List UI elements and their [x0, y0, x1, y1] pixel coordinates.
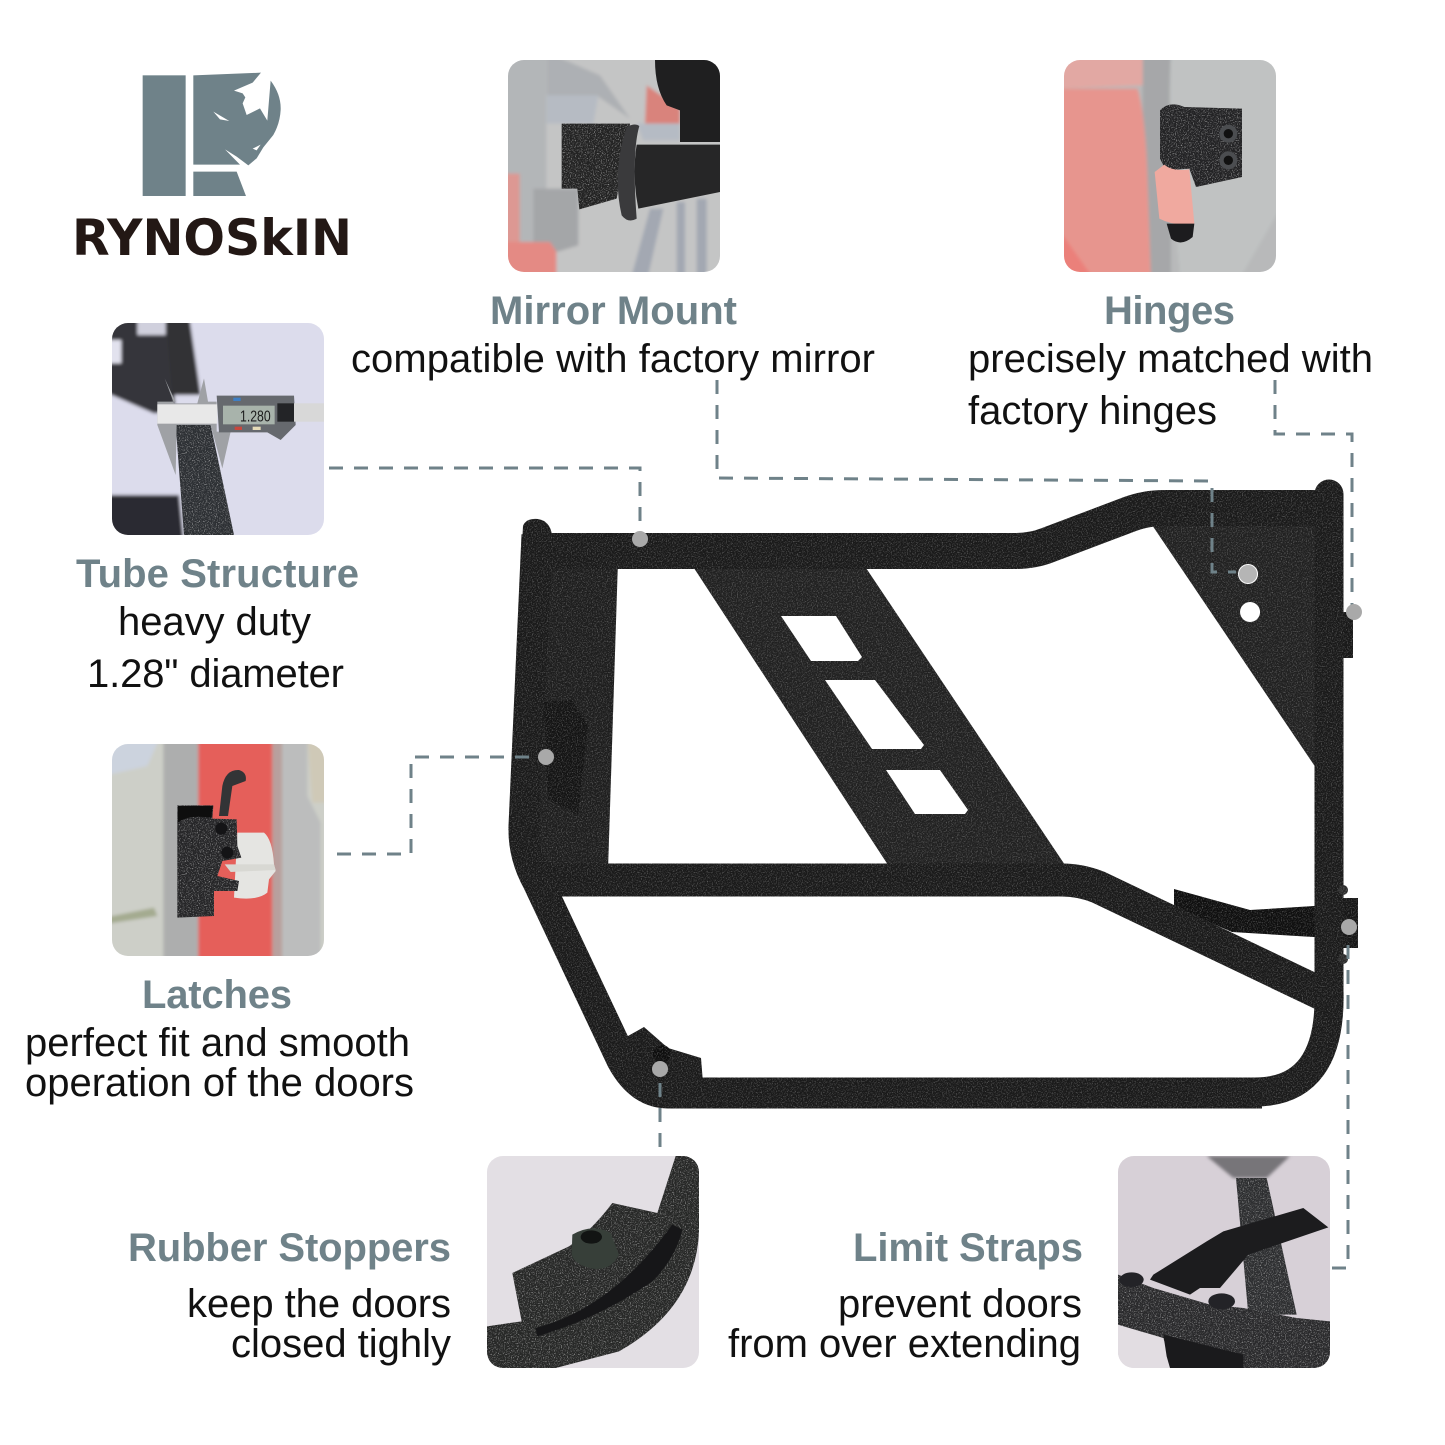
dashed leader: hinges [1275, 380, 1352, 612]
heading: Mirror Mount [490, 289, 737, 333]
photo: latch [112, 744, 324, 956]
description: heavy duty [118, 600, 311, 644]
diagonal steel panel with cutouts [690, 562, 1067, 868]
upper right steel panel [1150, 522, 1316, 768]
dashed leader: mirror mount [717, 380, 1236, 572]
description: keep the doors [187, 1282, 451, 1326]
stopper screw [653, 1045, 671, 1063]
description [187, 1282, 451, 1366]
photo: mirror mount [508, 60, 720, 272]
middle tube [545, 880, 1322, 994]
left tube cap [522, 519, 552, 546]
text block: tube structure [76, 552, 359, 696]
left steel panel [530, 560, 618, 870]
strap bracket [1330, 898, 1358, 948]
photo: hinges [1064, 60, 1276, 272]
description: prevent doors [838, 1282, 1082, 1326]
icon: rhino R mark [143, 73, 281, 196]
photo: tube structure with caliper [112, 323, 324, 535]
dashed leader: tube structure [329, 468, 640, 538]
rubber stopper bracket [612, 1027, 705, 1108]
top tube [545, 508, 1325, 551]
photo: tube structure with caliper: 1.280 [240, 408, 271, 425]
dashed leader: limit straps [1332, 928, 1348, 1268]
callout dot: hinges [1346, 604, 1362, 620]
heading: Latches [142, 973, 292, 1017]
callout dot: mirror mount [1239, 565, 1257, 583]
photo: limit strap [1118, 1156, 1330, 1368]
callout dot: tube [632, 531, 648, 547]
lower strap screw [1338, 954, 1348, 964]
heading: Rubber Stoppers [128, 1226, 451, 1270]
lower and left tube [524, 535, 1262, 1093]
logo: RYNOSkIN [72, 73, 352, 267]
callout dot: limit strap [1341, 919, 1357, 935]
heading: Limit Straps [853, 1226, 1083, 1270]
tube door frame [522, 494, 1358, 1108]
photo: rubber stopper [487, 1156, 699, 1368]
description [87, 600, 344, 696]
dashed leader: latches [337, 757, 545, 854]
description [728, 1282, 1082, 1366]
brand wordmark: RYNOSkIN [72, 209, 352, 267]
hinge bracket [1340, 612, 1353, 658]
text block: latches [25, 973, 414, 1105]
latch bracket [544, 700, 588, 815]
tubes [524, 494, 1329, 1093]
description: perfect fit and smooth [25, 1021, 410, 1065]
hinge side tube [1255, 494, 1329, 1092]
callout dot: latches [538, 749, 554, 765]
description [25, 1021, 414, 1105]
callout dot: rubber stopper [652, 1061, 668, 1077]
description: precisely matched with [968, 337, 1373, 381]
limit strap [1174, 889, 1330, 938]
description: factory hinges [968, 389, 1217, 433]
description: from over extending [728, 1322, 1081, 1366]
text block: limit straps [728, 1226, 1083, 1366]
upper strap screw [1338, 885, 1348, 895]
heading: Tube Structure [76, 552, 359, 596]
description: closed tighly [231, 1322, 451, 1366]
description: operation of the doors [25, 1061, 414, 1105]
description: 1.28" diameter [87, 652, 344, 696]
description [968, 337, 1373, 433]
heading: Hinges [1104, 289, 1235, 333]
text block: rubber stoppers [128, 1226, 451, 1366]
dashed leader: rubber stoppers [658, 1070, 662, 1147]
description: compatible with factory mirror [351, 337, 875, 381]
text block: hinges [968, 289, 1373, 433]
text block: mirror mount [351, 289, 875, 381]
